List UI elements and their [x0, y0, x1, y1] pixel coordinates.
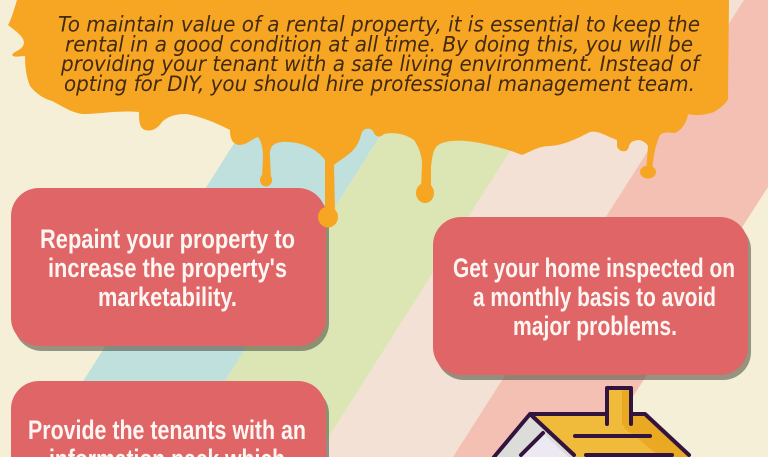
card: repaint: marketability. — [98, 282, 237, 312]
stripe: beige — [316, 0, 744, 457]
card: information pack: Provide the tenants with an — [28, 415, 306, 445]
body text: opting for DIY, you should hire professional management team. — [64, 72, 695, 96]
body text — [58, 12, 702, 96]
stripe: blue — [35, 0, 466, 457]
card: repaint: Repaint your property to — [40, 224, 295, 254]
drip bulb — [640, 166, 656, 178]
drip bulb — [260, 174, 272, 186]
card: repaint: increase the property's — [48, 253, 287, 283]
stripe: green — [177, 0, 606, 457]
card: information pack — [11, 381, 329, 457]
body text: rental in a good condition at all time. By doing this, you will be — [65, 32, 693, 56]
body text: providing your tenant with a safe living environment. Instead of — [60, 52, 702, 76]
stripe: pink — [453, 0, 768, 457]
card: inspection — [433, 217, 751, 380]
body text: To maintain value of a rental property, it is essential to keep the — [58, 12, 700, 36]
card: repaint — [11, 188, 329, 351]
honey drip banner — [8, 0, 729, 228]
drip bulb — [416, 183, 434, 203]
drip bulb — [318, 206, 338, 228]
icon: house — [492, 388, 690, 457]
card: inspection: major problems. — [513, 311, 677, 341]
